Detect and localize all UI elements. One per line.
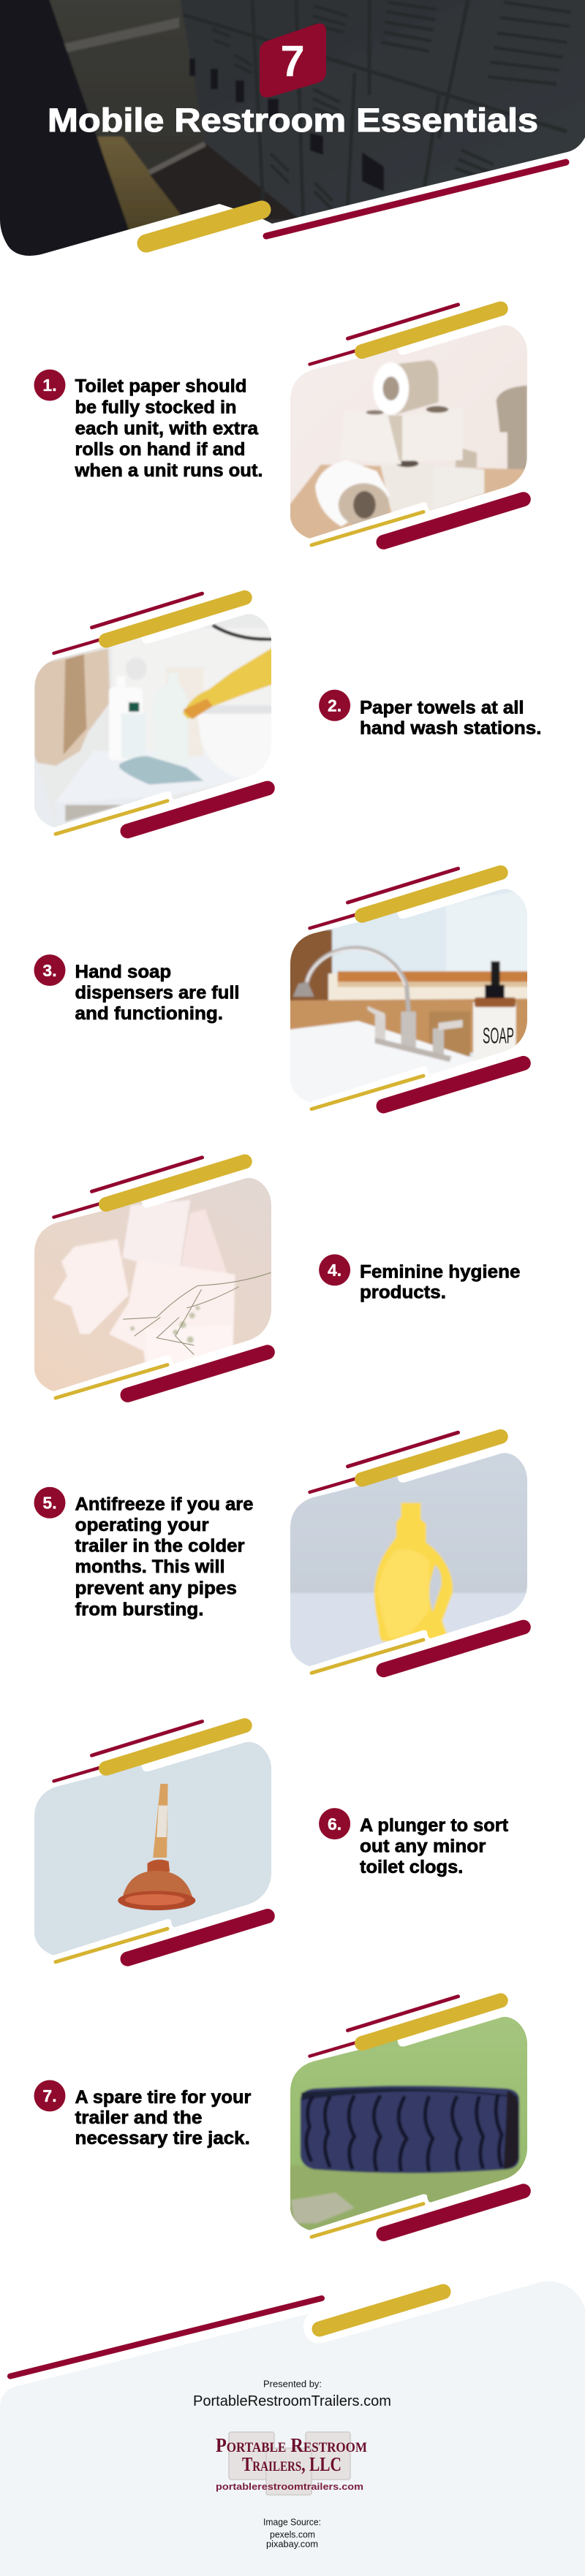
text: trailer and the — [75, 2108, 203, 2128]
photo: sink and soap dispenser — [290, 889, 527, 1102]
item 3: hand soap — [34, 868, 534, 1112]
image source credits: Image Source: — [263, 2517, 321, 2527]
item 4: feminine hygiene — [26, 1158, 520, 1407]
text: A spare tire for your — [75, 2087, 252, 2108]
text: Hand soap — [75, 962, 171, 982]
number circle — [34, 954, 66, 986]
text: Feminine hygiene — [360, 1262, 520, 1283]
text: months. This will — [75, 1557, 225, 1577]
dried flower stem — [123, 1272, 271, 1355]
title: Mobile Restroom Essentials — [48, 102, 538, 139]
item 1: toilet paper — [34, 305, 534, 550]
number circle — [34, 1487, 66, 1519]
text: operating your — [75, 1515, 209, 1535]
text: dispensers are full — [75, 982, 240, 1003]
number circle: 6. — [328, 1815, 341, 1834]
text — [360, 1262, 520, 1303]
text: when a unit runs out. — [74, 460, 263, 481]
number circle: 7. — [42, 2086, 57, 2105]
photo: yellow antifreeze bottle — [290, 1453, 527, 1666]
number circle — [319, 690, 350, 721]
text: Antifreeze if you are — [75, 1494, 253, 1514]
photo: toilet paper rolls — [290, 325, 527, 539]
accent bars — [310, 1432, 524, 1673]
text: products. — [360, 1283, 446, 1303]
number badge: 7 — [280, 37, 305, 86]
accent bars — [310, 868, 524, 1109]
footer accent bars — [10, 2292, 443, 2376]
text: out any minor — [360, 1836, 486, 1856]
text — [75, 1494, 253, 1619]
number circle — [319, 1808, 350, 1839]
accent bars — [54, 1158, 268, 1398]
number circle: 5. — [42, 1494, 57, 1513]
text: be fully stocked in — [75, 398, 237, 418]
number circle: 2. — [328, 696, 341, 715]
item 7: spare tire — [34, 1996, 534, 2250]
text — [75, 2087, 252, 2148]
text: rolls on hand if and — [75, 439, 246, 460]
number badge — [260, 23, 326, 97]
logo text: Portable Restroom — [216, 2434, 367, 2456]
text: toilet clogs. — [360, 1857, 463, 1877]
accent bars — [54, 1722, 268, 1962]
number circle: 4. — [328, 1261, 341, 1280]
photo: sink and soap dispenser: SOAP — [483, 1023, 514, 1049]
photo: bathroom cleaning — [34, 614, 271, 827]
number circle — [34, 2080, 66, 2111]
text — [75, 962, 240, 1024]
accent bars — [310, 1996, 524, 2237]
text: hand wash stations. — [360, 718, 541, 739]
image source credits: pixabay.com — [266, 2539, 318, 2549]
logo tiles — [229, 2432, 350, 2495]
number circle: 1. — [42, 376, 57, 395]
presented by label: Presented by: — [263, 2378, 322, 2390]
photo: large tire on grass — [290, 2017, 527, 2230]
item 2: paper towels — [26, 593, 541, 844]
number circle — [319, 1254, 350, 1285]
accent bars — [310, 305, 524, 545]
number circle: 3. — [42, 961, 57, 980]
logo text: Trailers, LLC — [242, 2453, 341, 2475]
logo text — [216, 2434, 367, 2492]
image source credits — [263, 2517, 321, 2549]
item 5: antifreeze — [34, 1432, 534, 1679]
item 6: plunger — [26, 1722, 509, 1969]
text: each unit, with extra — [75, 418, 259, 438]
photo: sanitary pads — [34, 1178, 271, 1391]
text: from bursting. — [75, 1599, 203, 1619]
text: Toilet paper should — [75, 376, 247, 397]
header accent bars — [146, 162, 566, 243]
header panel: locker room photo — [0, 0, 585, 270]
footer panel — [0, 2281, 585, 2576]
text: Paper towels at all — [360, 697, 524, 718]
text: prevent any pipes — [75, 1578, 237, 1598]
text: necessary tire jack. — [75, 2128, 250, 2148]
text — [74, 376, 263, 481]
accent bars — [54, 593, 268, 834]
logo text: portablerestroomtrailers.com — [216, 2481, 363, 2492]
text — [360, 697, 541, 739]
text — [360, 1815, 509, 1877]
logo: Portable Restroom Trailers — [216, 2432, 367, 2495]
text: and functioning. — [75, 1003, 223, 1024]
website name: PortableRestroomTrailers.com — [193, 2393, 391, 2409]
text: A plunger to sort — [360, 1815, 509, 1836]
number circle — [34, 370, 66, 400]
photo: toilet plunger — [34, 1742, 271, 1956]
text: trailer in the colder — [75, 1536, 245, 1557]
image source credits: pexels.com — [270, 2528, 315, 2540]
